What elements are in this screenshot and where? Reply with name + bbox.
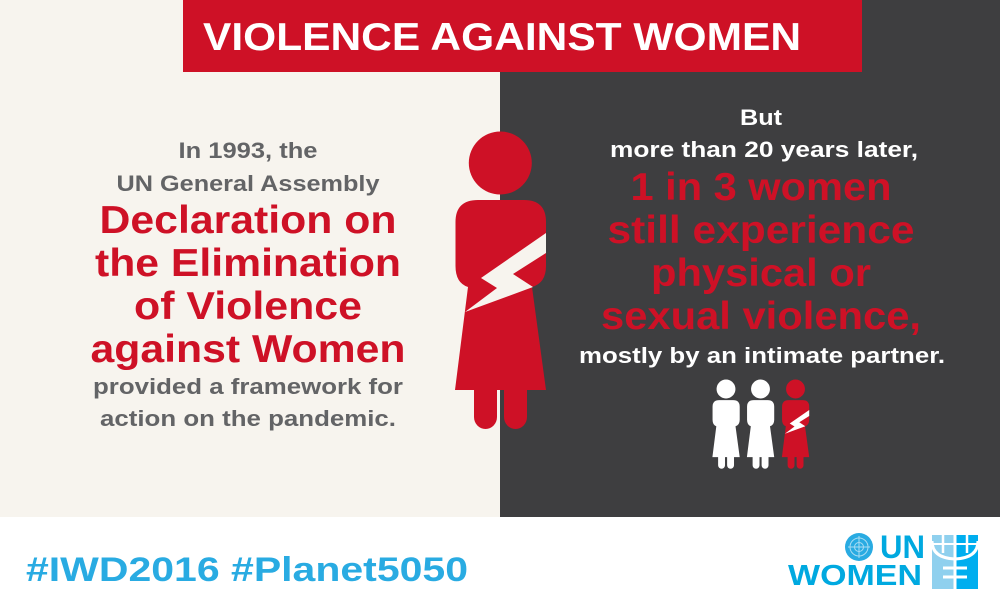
text block: declaration <box>90 138 406 431</box>
text block: statistic: still experience <box>608 209 914 252</box>
logo: UN Women: WOMEN <box>788 560 922 592</box>
logo: UN Women <box>788 529 978 592</box>
text block: statistic: physical or <box>651 252 871 295</box>
text block: declaration: provided a framework for <box>93 374 403 399</box>
hashtags: #IWD2016 #Planet5050 <box>26 551 468 589</box>
text block: statistic: more than 20 years later, <box>610 137 918 162</box>
text block: declaration: against Women <box>90 328 406 371</box>
text block: statistic <box>579 105 945 368</box>
text block: statistic: sexual violence, <box>601 295 921 338</box>
text block: statistic: But <box>740 105 783 130</box>
panel: left background <box>0 0 500 517</box>
text block: statistic: 1 in 3 women <box>630 166 892 209</box>
text block: declaration: action on the pandemic. <box>100 406 396 431</box>
emblem: women symbol <box>932 535 978 589</box>
icon: large woman with lightning bolt <box>455 132 546 429</box>
title banner: VIOLENCE AGAINST WOMEN <box>203 16 801 59</box>
text block: declaration: the Elimination <box>95 242 401 285</box>
text block: statistic: mostly by an intimate partner. <box>579 343 945 368</box>
text block: declaration: Declaration on <box>100 199 396 242</box>
text block: declaration: In 1993, the <box>178 138 318 163</box>
icon: three women, one in red <box>712 380 809 469</box>
emblem: UN globe <box>845 533 873 561</box>
title banner <box>183 0 862 72</box>
text block: declaration: of Violence <box>134 285 362 328</box>
panel: right background <box>500 0 1000 517</box>
text block: declaration: UN General Assembly <box>116 171 380 196</box>
logo: UN Women: UN <box>880 529 925 565</box>
